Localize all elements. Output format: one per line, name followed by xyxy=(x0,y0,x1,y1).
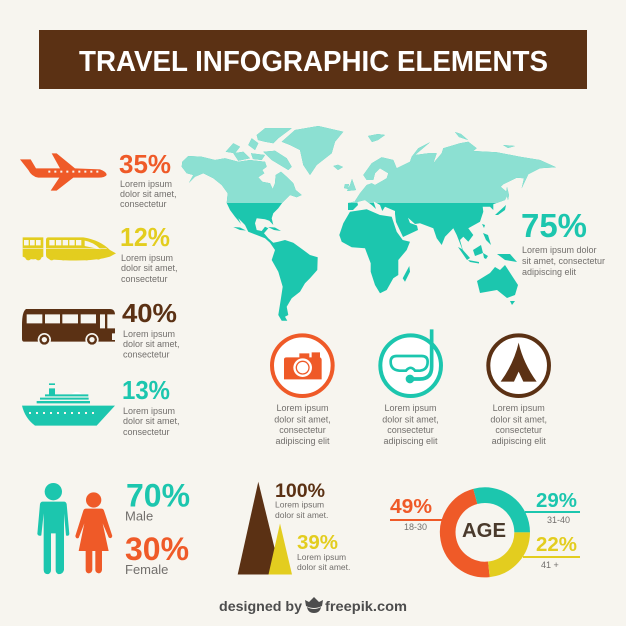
tent item: consectetur xyxy=(495,425,542,435)
age donut chart: 41 + xyxy=(541,560,559,570)
camera item: dolor sit amet, xyxy=(274,414,331,424)
yellow triangle xyxy=(268,524,292,574)
stat: ship 13% xyxy=(22,375,180,437)
stat: plane 35% xyxy=(20,149,177,209)
snorkel item: Lorem ipsum xyxy=(384,403,437,413)
icon: tent xyxy=(488,335,549,396)
stat: plane 35%: Lorem ipsum xyxy=(120,179,172,189)
snorkel item xyxy=(380,329,441,446)
gender chart: 30% xyxy=(125,531,189,567)
icon: snorkel mask xyxy=(380,329,441,396)
stat: bus 40%: 40% xyxy=(122,298,177,328)
stat: world 75%: sit amet, consectetur xyxy=(522,256,605,266)
stat: bus 40%: dolor sit amet, xyxy=(123,339,180,349)
tent item: adipiscing elit xyxy=(492,436,546,446)
stat: bus 40% xyxy=(22,298,180,360)
gender chart: 70% xyxy=(126,478,190,514)
stat: plane 35%: dolor sit amet, xyxy=(120,189,177,199)
credit line: designed by xyxy=(219,598,302,614)
icon: bus xyxy=(22,309,115,346)
age donut chart: 49% xyxy=(390,495,432,518)
icon: man xyxy=(37,483,69,574)
world map xyxy=(182,126,556,321)
age donut chart: 18-30 xyxy=(404,522,427,532)
stat: world 75% xyxy=(521,207,605,277)
triangle chart: dolor sit amet. xyxy=(297,562,350,572)
brown triangle xyxy=(238,482,275,574)
snorkel item: dolor sit amet, xyxy=(382,414,439,424)
snorkel item: consectetur xyxy=(387,425,434,435)
triangle chart: Lorem ipsum xyxy=(297,552,346,562)
tent item: dolor sit amet, xyxy=(490,414,547,424)
credit line: freepik.com xyxy=(325,598,407,614)
stat: plane 35%: consectetur xyxy=(120,199,167,209)
title banner xyxy=(39,30,587,89)
camera item: consectetur xyxy=(279,425,326,435)
age donut chart: 31-40 xyxy=(547,515,570,525)
camera item: adipiscing elit xyxy=(275,436,330,446)
title: TRAVEL INFOGRAPHIC ELEMENTS xyxy=(79,46,548,78)
icon: freepik logo xyxy=(305,597,323,613)
tent item: Lorem ipsum xyxy=(493,403,545,413)
stat: ship 13%: Lorem ipsum xyxy=(123,406,175,416)
stat: world 75%: adipiscing elit xyxy=(522,267,577,277)
snorkel item: adipiscing elit xyxy=(383,436,438,446)
stat: bus 40%: consectetur xyxy=(123,350,170,360)
stat: ship 13%: dolor sit amet, xyxy=(123,416,180,426)
icon: woman xyxy=(75,492,112,573)
gender chart: Female xyxy=(125,562,168,577)
stat: train 12%: consectetur xyxy=(121,274,168,284)
donut xyxy=(448,495,522,570)
gender chart xyxy=(37,478,190,577)
stat: train 12%: dolor sit amet, xyxy=(121,263,178,273)
gender chart: Male xyxy=(125,509,153,524)
triangle chart: Lorem ipsum xyxy=(275,500,324,510)
icon: ship xyxy=(22,383,115,426)
age donut chart: AGE xyxy=(462,520,506,542)
age donut chart xyxy=(390,489,580,570)
credit line xyxy=(219,597,407,614)
age donut chart: 22% xyxy=(536,533,577,556)
stat: train 12% xyxy=(23,222,178,284)
icon: train xyxy=(23,237,116,261)
camera item xyxy=(272,335,333,446)
stat: ship 13%: consectetur xyxy=(123,427,170,437)
triangle chart: 100% xyxy=(275,480,325,502)
triangle chart xyxy=(238,480,350,574)
stat: plane 35%: 35% xyxy=(119,149,171,179)
stat: train 12%: Lorem ipsum xyxy=(121,253,173,263)
tent item xyxy=(488,335,549,446)
stat: world 75%: Lorem ipsum dolor xyxy=(522,245,597,255)
icon: camera xyxy=(272,335,333,396)
age donut chart: 29% xyxy=(536,489,577,512)
stat: ship 13%: 13% xyxy=(122,375,170,405)
camera item: Lorem ipsum xyxy=(276,403,329,413)
icon: plane xyxy=(20,153,107,191)
stat: train 12%: 12% xyxy=(120,222,170,252)
triangle chart: dolor sit amet. xyxy=(275,510,328,520)
stat: bus 40%: Lorem ipsum xyxy=(123,329,175,339)
triangle chart: 39% xyxy=(297,532,338,554)
stat: world 75%: 75% xyxy=(521,207,587,244)
